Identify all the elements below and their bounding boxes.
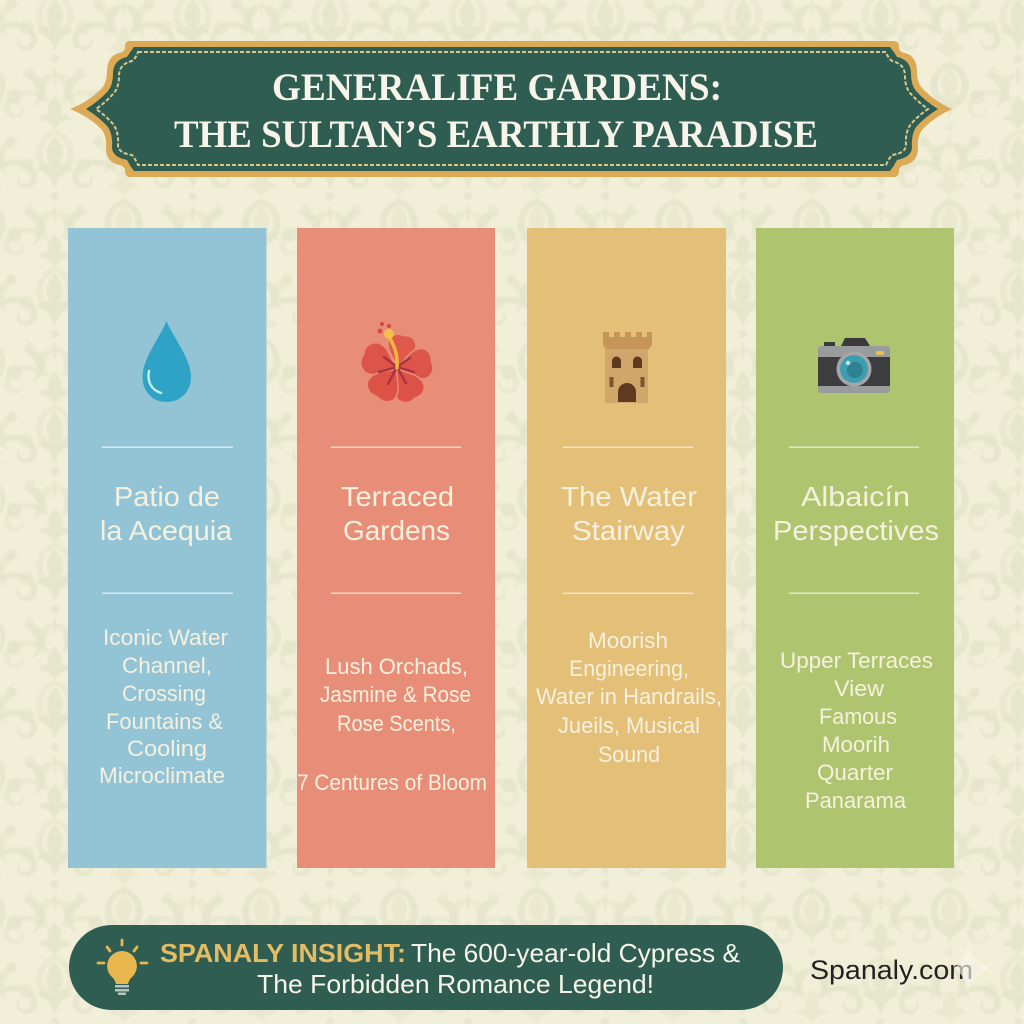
panel: The Water Stairway <box>527 228 726 868</box>
panel title: la Acequia <box>100 515 232 546</box>
icon: hibiscus flower <box>357 322 435 407</box>
panel title: Albaicín <box>801 481 910 512</box>
panel body text <box>99 625 228 788</box>
icon: camera <box>818 338 890 393</box>
panel body text <box>780 648 933 813</box>
panel body text: Moorih <box>822 732 890 757</box>
panel title: Terraced <box>341 481 454 512</box>
icon: water drop <box>142 321 191 402</box>
icon: tower <box>603 332 652 403</box>
insight callout <box>69 925 783 1010</box>
panel body text: Upper Terraces <box>780 648 933 673</box>
panel: Albaicín Perspectives <box>756 228 954 868</box>
panel title <box>341 481 454 546</box>
panel title: Gardens <box>343 515 450 546</box>
panel body text: Panarama <box>805 788 907 813</box>
panel body text: Water in Handrails, <box>536 684 722 709</box>
panel body text: Channel, <box>122 653 212 678</box>
panel title <box>561 481 697 546</box>
panel body text: Quarter <box>817 760 893 785</box>
panel title <box>100 481 232 546</box>
title text: THE SULTAN’S EARTHLY PARADISE <box>174 113 818 156</box>
title text <box>174 66 818 156</box>
banner frame <box>70 41 952 177</box>
panel title <box>773 481 939 546</box>
insight text: The 600-year-old Cypress & <box>411 938 740 968</box>
icon: light bulb <box>98 940 147 995</box>
title text: GENERALIFE GARDENS: <box>272 66 722 109</box>
panel: Terraced Gardens <box>297 228 495 868</box>
panel body text <box>536 628 722 767</box>
panel title: The Water <box>561 481 697 512</box>
panel body text <box>297 654 487 795</box>
insight text <box>160 938 740 999</box>
panel body text: Microclimate <box>99 763 225 788</box>
panel body text: Rose Scents, <box>337 711 456 736</box>
panel body text: Iconic Water <box>103 625 228 650</box>
panel body text: Sound <box>598 742 660 767</box>
title banner <box>70 41 952 177</box>
insight text: SPANALY INSIGHT: <box>160 938 406 968</box>
panel title: Patio de <box>114 481 220 512</box>
insight text: The Forbidden Romance Legend! <box>257 969 654 999</box>
panel body text: Moorish <box>588 628 668 653</box>
brand logo text: Spanaly.com <box>810 955 973 985</box>
panel body text: Jasmine & Rose <box>320 682 471 707</box>
panel body text: 7 Centures of Bloom <box>297 770 487 795</box>
panel body text: Crossing <box>122 681 206 706</box>
panel title: Stairway <box>572 515 685 546</box>
panel body text: View <box>834 676 884 701</box>
panel body text: Engineering, <box>569 656 689 681</box>
panel body text: Fountains & <box>106 709 223 734</box>
panel: Patio de la Acequia <box>68 228 266 868</box>
brand logo text <box>810 945 990 992</box>
panel body text: Famous <box>819 704 897 729</box>
panel body text: Jueils, Musical <box>558 713 700 738</box>
panel title: Perspectives <box>773 515 939 546</box>
panel body text: Lush Orchads, <box>325 654 468 679</box>
panel body text: Cooling <box>127 736 207 761</box>
